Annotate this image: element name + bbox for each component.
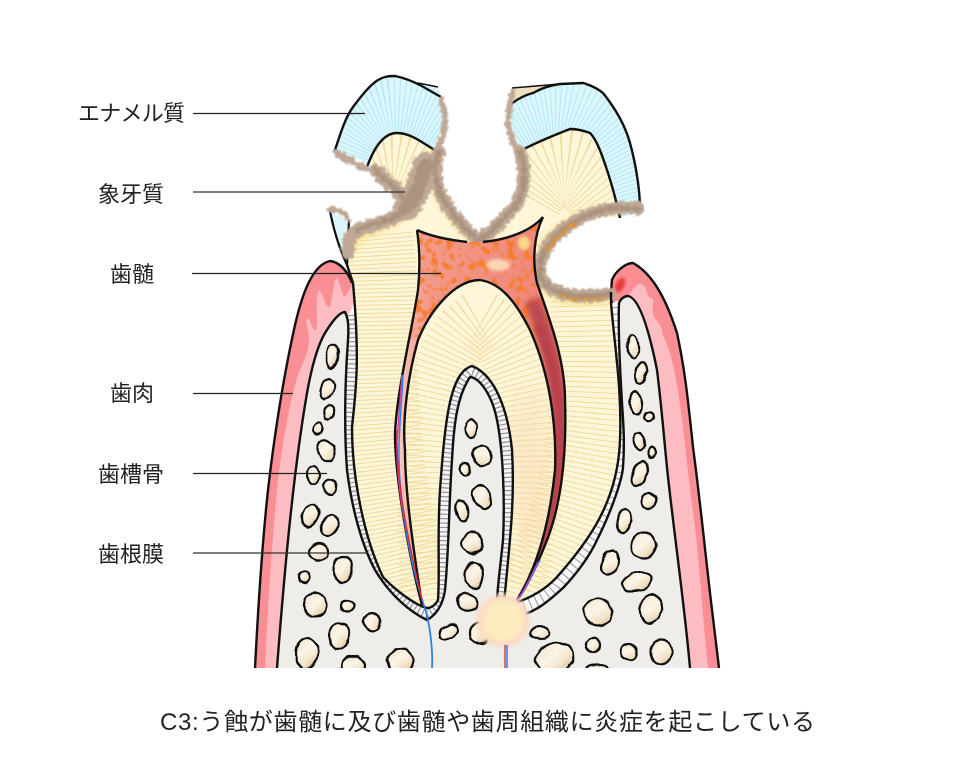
- tooth root outlines: [347, 265, 620, 608]
- label: periodontal ligament: 歯根膜: [98, 542, 164, 567]
- label: pulp: 歯髄: [110, 262, 154, 287]
- dentin: [347, 129, 620, 608]
- enamel fragment at left shoulder: [330, 211, 349, 265]
- label: enamel: エナメル質: [78, 101, 185, 126]
- label: alveolar bone: 歯槽骨: [98, 462, 164, 487]
- label: gingiva: 歯肉: [110, 381, 154, 406]
- enamel right: [508, 83, 640, 218]
- enamel left: [335, 76, 445, 167]
- dental pulp: [395, 217, 565, 605]
- right gum: [611, 263, 719, 668]
- caries decay rim: [330, 92, 638, 299]
- label: dentin: 象牙質: [98, 182, 164, 207]
- caption: C3:う蝕が歯髄に及び歯髄や歯周組織に炎症を起こしている: [160, 709, 815, 736]
- left gum: [255, 261, 354, 668]
- periodontal ligament: [348, 303, 620, 614]
- apical lesion: [473, 591, 533, 668]
- alveolar bone: [277, 296, 690, 668]
- nerves and blood vessels: [397, 375, 540, 668]
- bone marrow cavities: [296, 336, 672, 677]
- illustration: tooth cross-section with C3 caries: [255, 76, 719, 677]
